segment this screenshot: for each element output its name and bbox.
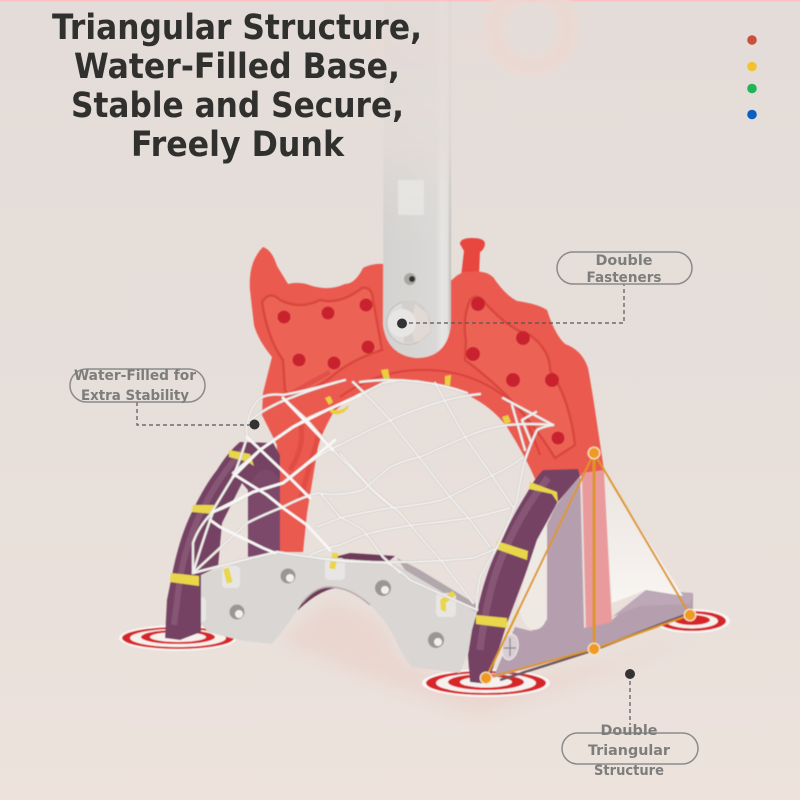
title: Water-Filled Base, [74,47,400,87]
target middle [422,669,550,697]
left purple arch [165,442,280,640]
title: Freely Dunk [131,125,345,165]
callout: double triangular structure: Triangular [588,743,670,759]
callout: double fasteners: Fasteners [586,270,662,286]
callout: water-filled: Water-Filled for [74,368,196,384]
callout: double triangular structure: Double [600,723,658,739]
callout: double fasteners: Double [596,253,652,269]
gray water base [193,552,476,673]
target left [119,625,237,651]
net [193,380,553,610]
callout: double triangular structure [562,669,698,779]
yellow top tabs [325,369,511,424]
title [52,8,422,165]
floor shadows [280,600,700,715]
title: Triangular Structure, [52,8,422,48]
target right [654,609,730,633]
triangle white area [604,470,683,603]
purple back bar under base [285,553,395,610]
purple back post [248,461,280,557]
callout: double triangular structure: Structure [594,763,664,779]
callout: water-filled: Extra Stability [81,388,189,404]
blurred hoop ring in background [365,0,568,66]
orange triangle structure [480,447,696,684]
white support arm [383,0,451,358]
pink post front [582,470,612,628]
title: Stable and Secure, [71,86,404,126]
product: basketball hoop [119,150,730,711]
callout: double fasteners [397,252,692,328]
color dots [747,35,757,119]
right purple arch [468,469,580,684]
red crown backboard [250,238,604,552]
callout: water-filled [70,368,260,430]
right lavender foot [493,473,693,680]
